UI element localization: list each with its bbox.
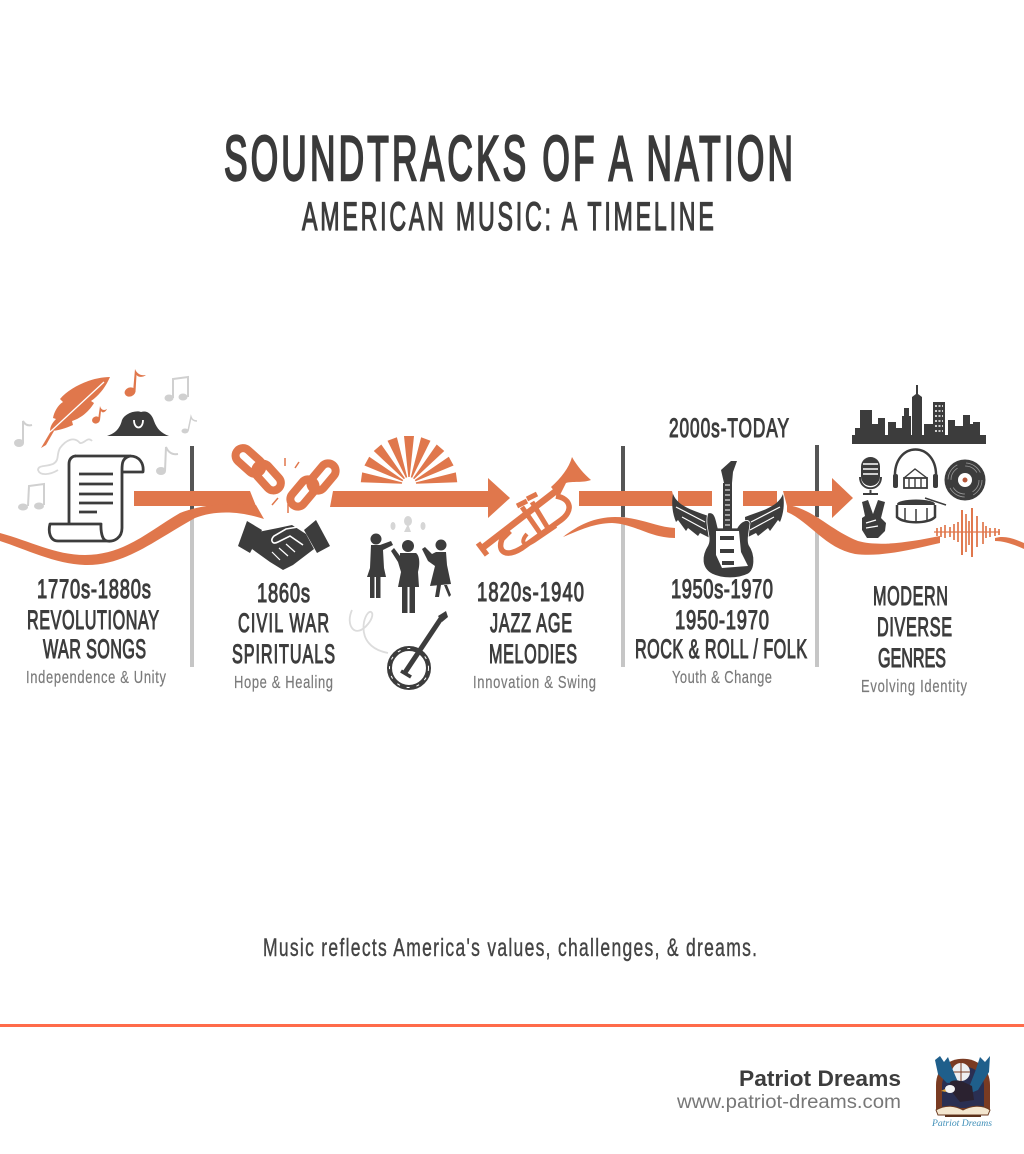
icon: handshake bbox=[238, 520, 330, 570]
label: revolutionay: REVOLUTIONAY bbox=[27, 605, 159, 635]
label: civil war: CIVIL WAR bbox=[238, 608, 329, 638]
label: diverse: DIVERSE bbox=[877, 612, 952, 642]
icon: snare drum bbox=[897, 498, 946, 522]
squiggle line bbox=[38, 439, 92, 474]
icon: tricorn hat bbox=[107, 411, 169, 436]
timeline dividers bbox=[190, 445, 819, 667]
icon: headphones with drum bbox=[893, 450, 938, 488]
label: war songs: WAR SONGS bbox=[43, 634, 146, 664]
label: 1860s: 1860s bbox=[257, 577, 310, 608]
icon: peace hand bbox=[862, 500, 886, 538]
caption: youth: Youth & Change bbox=[672, 668, 772, 688]
closing statement: Music reflects America's values, challenges, & dreams. bbox=[263, 933, 757, 962]
timeline arrow band bbox=[134, 478, 853, 518]
label: 1770s-1880s: 1770s-1880s bbox=[37, 573, 151, 604]
icon: broken chain bbox=[232, 445, 339, 513]
icon: sound wave bbox=[934, 508, 1000, 557]
label: 1950-1970: 1950-1970 bbox=[675, 604, 769, 635]
icon: city skyline bbox=[852, 385, 986, 444]
label: modern: MODERN bbox=[873, 581, 948, 611]
label: spirituals: SPIRITUALS bbox=[232, 639, 335, 669]
icon: quill bbox=[41, 377, 110, 448]
label: 1950s-1970: 1950s-1970 bbox=[671, 573, 773, 604]
caption: independence: Independence & Unity bbox=[26, 668, 166, 688]
label: melodies: MELODIES bbox=[489, 639, 577, 669]
icon: trumpet bbox=[478, 457, 591, 555]
icon: vinyl record bbox=[944, 460, 986, 500]
footer brand name: Patriot Dreams bbox=[739, 1066, 901, 1091]
logo: patriot dreams eagle: Patriot Dreams bbox=[931, 1118, 993, 1128]
icon: microphone bbox=[860, 457, 881, 494]
panel: civil war spirituals bbox=[232, 445, 339, 693]
subtitle: AMERICAN MUSIC: A TIMELINE bbox=[302, 193, 714, 239]
icon: dancing silhouettes bbox=[367, 534, 451, 613]
footer url: www.patriot-dreams.com bbox=[676, 1092, 901, 1113]
label: jazz age: JAZZ AGE bbox=[490, 608, 572, 638]
panel: modern diverse genres bbox=[852, 385, 1000, 697]
icon: grey music notes bbox=[14, 377, 197, 510]
icon: banjo bbox=[350, 610, 448, 688]
label: genres: GENRES bbox=[878, 643, 946, 673]
icon: sunburst bbox=[361, 436, 457, 488]
caption: hope: Hope & Healing bbox=[234, 673, 333, 693]
grey music wisps bbox=[390, 516, 426, 532]
caption: innovation: Innovation & Swing bbox=[473, 673, 596, 693]
panel: jazz age melodies bbox=[473, 457, 596, 693]
footer rule bbox=[0, 1024, 1024, 1027]
label: 1820s-1940: 1820s-1940 bbox=[477, 576, 584, 607]
label: 2000s-today: 2000s-TODAY bbox=[669, 412, 789, 443]
caption: evolving identity: Evolving Identity bbox=[861, 677, 967, 697]
icon: orange music notes bbox=[91, 369, 146, 425]
flowing ribbon bbox=[0, 504, 1024, 565]
label: rock and roll / folk: ROCK & ROLL / FOLK bbox=[635, 634, 807, 664]
logo: patriot dreams eagle bbox=[931, 1056, 993, 1128]
icon: winged guitar bbox=[672, 461, 784, 578]
icon: scroll bbox=[49, 456, 143, 541]
title: SOUNDTRACKS OF A NATION bbox=[224, 123, 793, 194]
panel: rock and roll bbox=[635, 412, 807, 688]
panel: revolutionary war songs bbox=[14, 369, 197, 688]
